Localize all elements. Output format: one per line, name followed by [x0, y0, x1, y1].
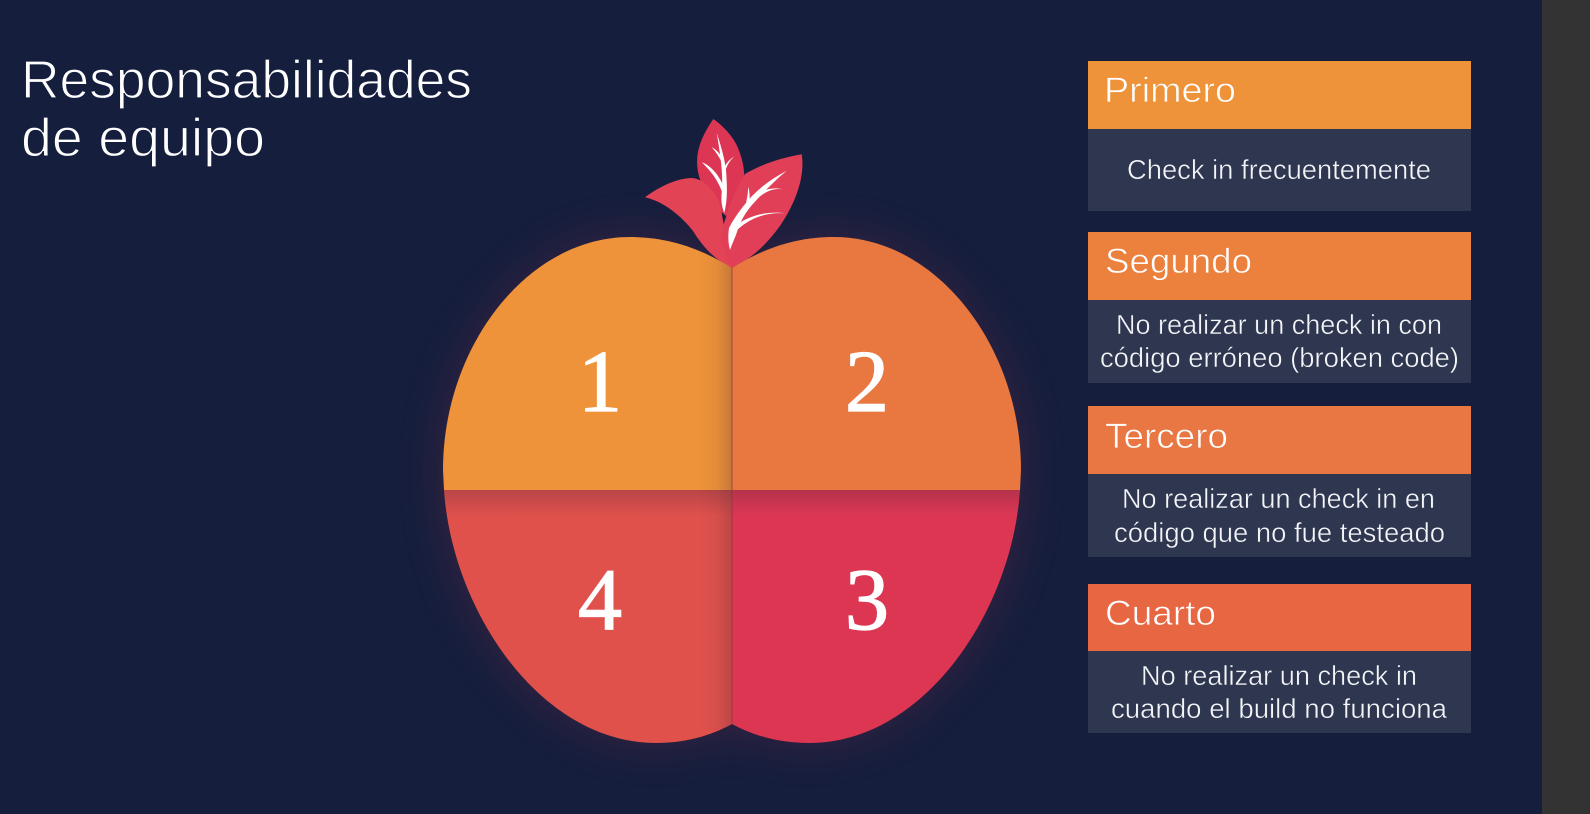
panel: cuarto: No realizar un check in [1141, 660, 1417, 691]
panel: tercero [1088, 406, 1471, 557]
panel: tercero: Tercero [1105, 417, 1228, 456]
panel: cuarto: cuando el build no funciona [1111, 693, 1447, 724]
panel: segundo [1088, 232, 1471, 383]
veins: top leaf [702, 133, 734, 213]
apple quadrant 2 [732, 237, 1021, 490]
panel: segundo: Segundo [1105, 242, 1252, 281]
number 4: 4 [578, 552, 622, 649]
number 2: 2 [845, 334, 889, 431]
leaf: top [697, 119, 744, 216]
title: Responsabilidades [21, 50, 472, 110]
number 3: 3 [845, 552, 889, 649]
panel: primero: Primero [1104, 71, 1236, 110]
leaf: left [645, 178, 732, 268]
number 1: 1 [578, 334, 622, 431]
panel: cuarto: Cuarto [1105, 594, 1216, 633]
veins: right leaf [728, 171, 787, 250]
panel: tercero: código que no fue testeado [1114, 517, 1445, 548]
panel: primero: Check in frecuentemente [1127, 154, 1431, 185]
apple quadrant 1 [443, 237, 732, 490]
icon: apple leaves [645, 119, 802, 268]
panel: tercero: No realizar un check in en [1122, 483, 1435, 514]
apple quadrant 3 [732, 490, 1020, 743]
fold shading [440, 240, 1024, 730]
apple glow [443, 237, 1021, 743]
title: de equipo [21, 108, 265, 168]
apple [440, 237, 1024, 743]
sidebar strip [1542, 0, 1590, 814]
panel: segundo: No realizar un check in con [1116, 309, 1442, 340]
title [21, 50, 472, 168]
panel: segundo: código erróneo (broken code) [1100, 342, 1459, 373]
panel: primero [1088, 61, 1471, 211]
leaf: right [720, 154, 802, 268]
panel: cuarto [1088, 584, 1471, 733]
apple quadrant 4 [444, 490, 732, 743]
